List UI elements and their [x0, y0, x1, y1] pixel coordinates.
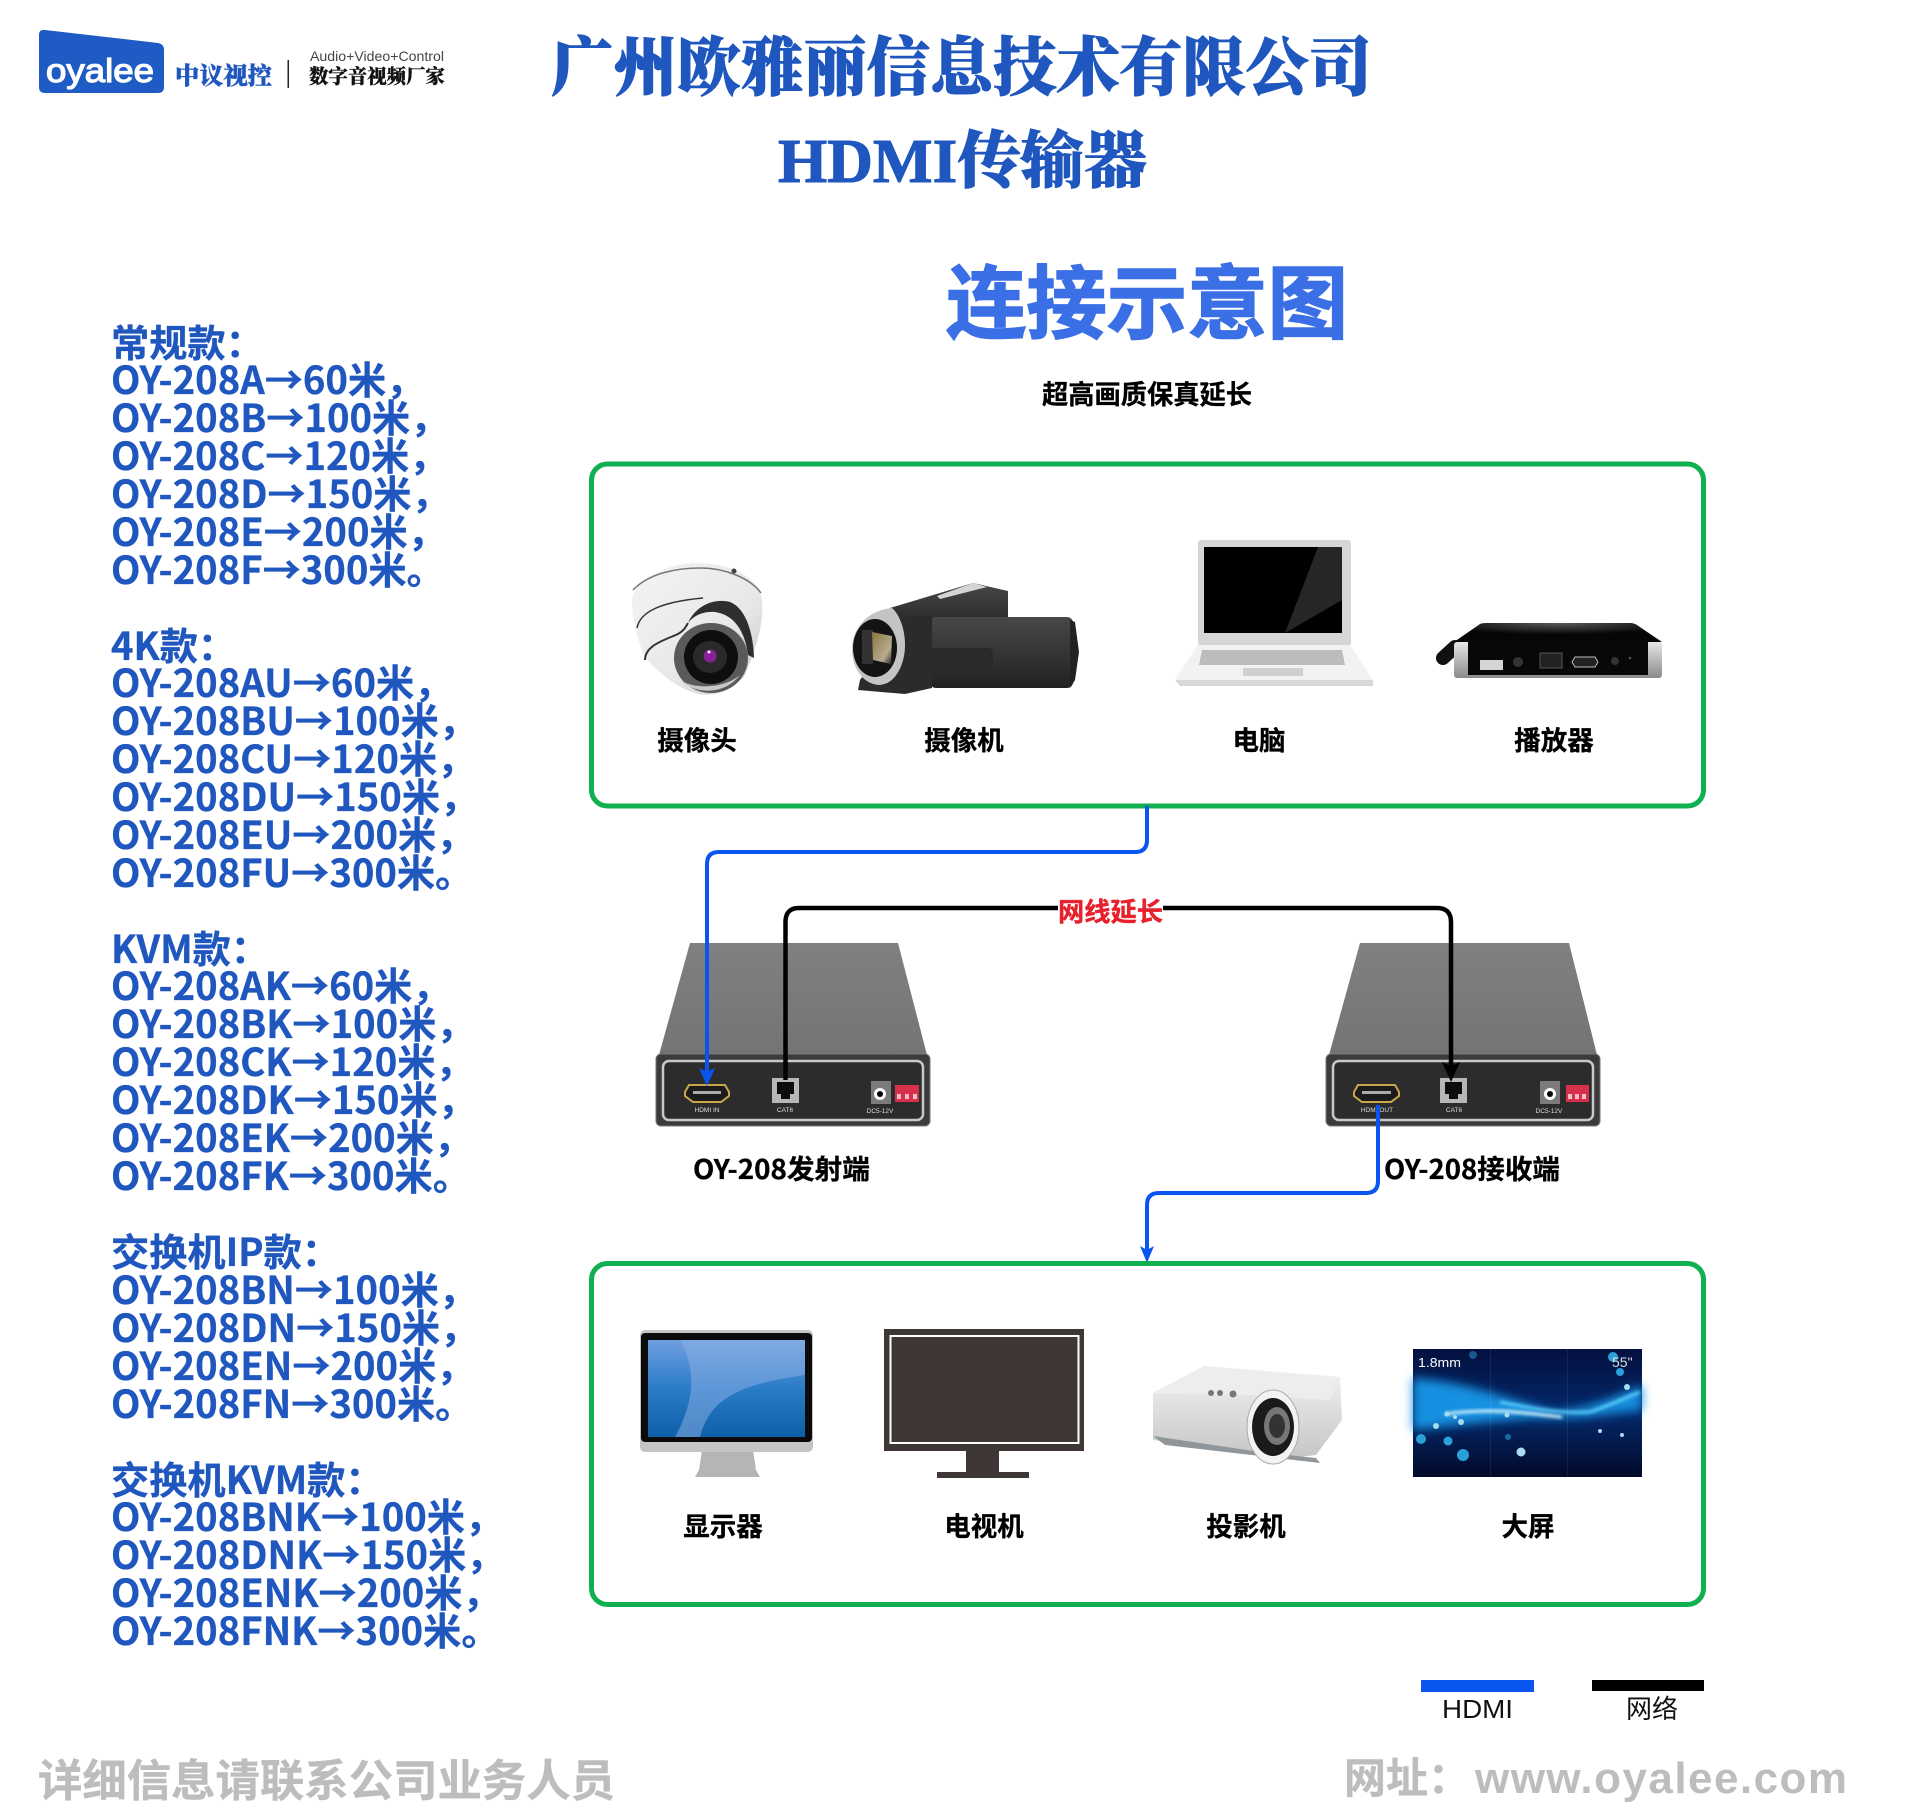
logo	[39, 30, 445, 93]
model list: OY-208DNK→150米，	[111, 1526, 504, 1581]
model list: OY-208DN→150米，	[111, 1299, 478, 1354]
switch: red DIP	[1566, 1085, 1589, 1102]
model list: OY-208AU→60米，	[111, 654, 452, 709]
model list: OY-208DK→150米，	[111, 1071, 476, 1126]
model list: KVM款：	[111, 920, 269, 975]
title: company name: 广州欧雅丽信息技术有限公司	[551, 33, 1372, 104]
model list: OY-208F→300米。	[111, 541, 445, 596]
icon: laptop	[1175, 540, 1373, 686]
model list: OY-208E→200米，	[111, 503, 446, 558]
panel: sources	[592, 464, 1704, 806]
port: DC power	[867, 1081, 894, 1115]
icon: monitor	[640, 1330, 813, 1477]
arrow: receiver to displays	[1140, 1105, 1378, 1263]
labels: displays	[683, 1505, 1554, 1544]
labels: sources: 摄像头	[657, 719, 737, 758]
legend: 网络	[1626, 1689, 1678, 1726]
port: CAT6	[772, 1078, 799, 1114]
port: CAT6	[1440, 1078, 1467, 1114]
model list: 交换机IP款：	[111, 1223, 340, 1278]
model list: OY-208BU→100米，	[111, 692, 477, 747]
device: OY-208 receiver	[1326, 943, 1600, 1126]
legend	[1421, 1680, 1704, 1726]
model list: OY-208FN→300米。	[111, 1375, 473, 1430]
model list: OY-208A→60米，	[111, 351, 424, 406]
label: network extension: 网线延长	[1058, 892, 1163, 929]
logo: oyalee	[46, 52, 154, 89]
device: OY-208 transmitter	[656, 943, 930, 1126]
labels: sources: 播放器	[1514, 719, 1594, 758]
footer: website: 网址：	[1344, 1745, 1470, 1806]
model list: 4K款：	[111, 617, 236, 672]
model list: OY-208EU→200米，	[111, 806, 474, 861]
icon: video wall	[1413, 1349, 1642, 1477]
model list: OY-208FU→300米。	[111, 844, 473, 899]
icon: camcorder	[852, 583, 1079, 694]
legend: HDMI	[1442, 1694, 1513, 1724]
footer: website: www.oyalee.com	[1474, 1754, 1847, 1803]
footer: website	[1344, 1745, 1847, 1806]
logo: 数字音视频厂家	[309, 61, 445, 89]
port: HDMI out: HDMI OUT	[1361, 1107, 1393, 1114]
model list: OY-208AK→60米，	[111, 957, 451, 1012]
model list: OY-208FK→300米。	[111, 1147, 471, 1202]
model list: OY-208CK→120米，	[111, 1033, 474, 1088]
icon: video wall: 55"	[1612, 1354, 1633, 1370]
model list: OY-208BK→100米，	[111, 995, 475, 1050]
label: receiver: OY-208接收端	[1384, 1148, 1560, 1187]
model list: 常规款：	[111, 314, 264, 369]
port: HDMI out	[1354, 1085, 1399, 1114]
model list: OY-208BN→100米，	[111, 1261, 477, 1316]
labels: sources: 电脑	[1232, 719, 1286, 758]
logo: 中议视控	[175, 56, 272, 91]
labels: displays: 显示器	[683, 1505, 763, 1544]
icon: dome camera	[632, 563, 762, 695]
arrow: network cable	[786, 908, 1460, 1082]
model list: OY-208EK→200米，	[111, 1109, 472, 1164]
model list: OY-208FNK→300米。	[111, 1602, 500, 1657]
port: DC power: DC5-12V	[867, 1108, 894, 1115]
icon: video wall: 1.8mm	[1418, 1355, 1461, 1370]
label: transmitter: OY-208发射端	[693, 1148, 870, 1187]
model list	[111, 314, 504, 1657]
port: CAT6: CAT6	[1446, 1107, 1462, 1114]
title: product name: HDMI传输器	[778, 127, 1147, 196]
labels: displays: 大屏	[1502, 1505, 1554, 1544]
icon: TV	[884, 1329, 1084, 1478]
model list: OY-208CU→120米，	[111, 730, 475, 785]
switch: red DIP	[895, 1085, 919, 1102]
labels: sources: 摄像机	[924, 719, 1004, 758]
heading: connection diagram: 连接示意图	[946, 240, 1348, 356]
labels: sources	[657, 719, 1594, 758]
port: DC power: DC5-12V	[1536, 1108, 1563, 1115]
port: DC power	[1536, 1081, 1563, 1115]
logo: Audio+Video+Control	[310, 48, 444, 64]
labels: displays: 电视机	[944, 1505, 1024, 1544]
model list: OY-208C→120米，	[111, 427, 447, 482]
model list: OY-208DU→150米，	[111, 768, 478, 823]
model list: 交换机KVM款：	[111, 1451, 384, 1506]
port: HDMI in	[685, 1085, 729, 1114]
model list: OY-208BNK→100米，	[111, 1488, 503, 1543]
model list: OY-208B→100米，	[111, 389, 448, 444]
icon: media player	[1443, 623, 1662, 678]
labels: displays: 投影机	[1206, 1505, 1286, 1544]
arrow: HDMI source to transmitter	[699, 806, 1147, 1086]
panel: displays	[592, 1264, 1704, 1604]
model list: OY-208D→150米，	[111, 465, 450, 520]
model list: OY-208EN→200米，	[111, 1337, 474, 1392]
model list: OY-208ENK→200米，	[111, 1564, 501, 1619]
port: HDMI in: HDMI IN	[695, 1107, 720, 1114]
icon: projector	[1153, 1366, 1342, 1464]
port: CAT6: CAT6	[777, 1107, 793, 1114]
subheading: 超高画质保真延长	[1042, 373, 1252, 412]
footer: contact note: 详细信息请联系公司业务人员	[38, 1745, 615, 1809]
